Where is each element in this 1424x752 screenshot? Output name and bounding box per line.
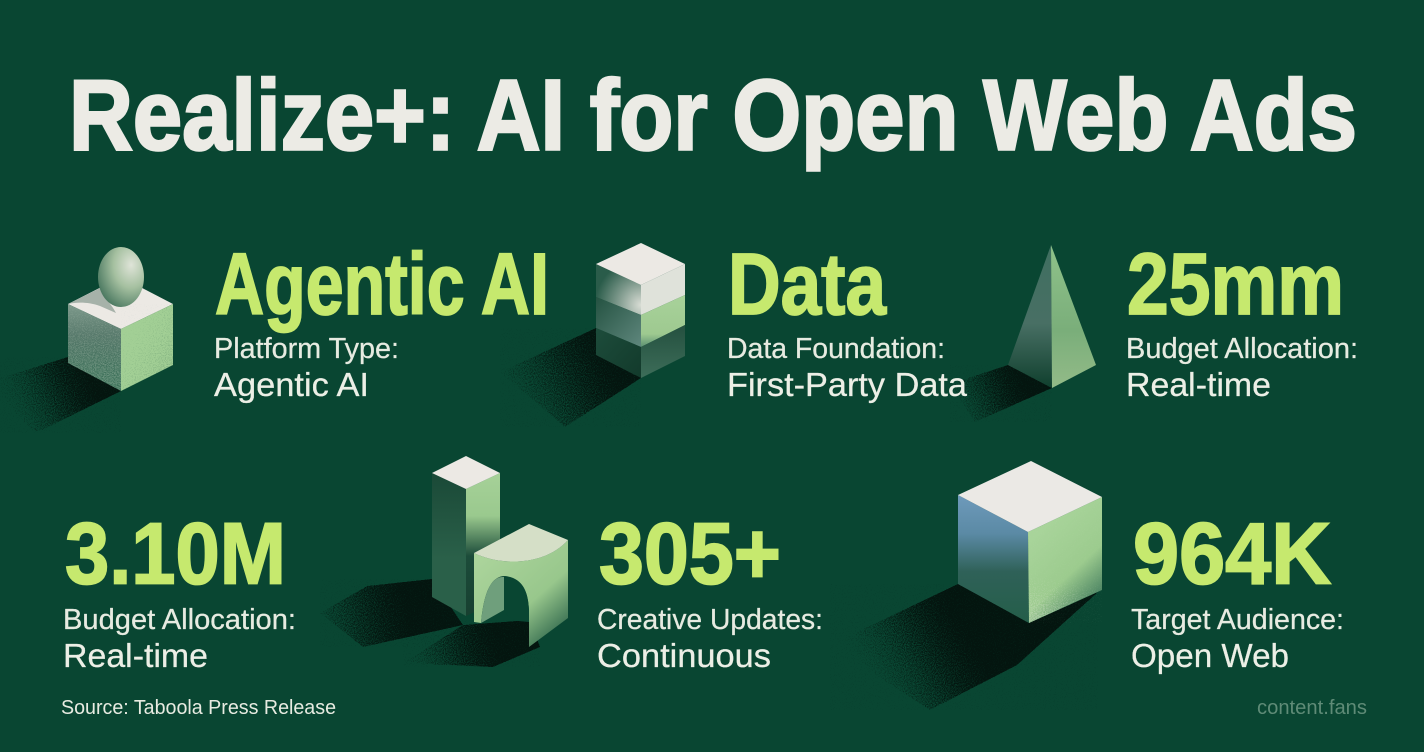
watermark: content.fans bbox=[1257, 697, 1367, 719]
big value: Data bbox=[728, 236, 887, 333]
shadow bbox=[950, 365, 1052, 422]
label: Budget Allocation: bbox=[1126, 333, 1358, 365]
egg bbox=[98, 247, 144, 307]
stat: 3.10M bbox=[63, 506, 296, 674]
big value: 964K bbox=[1133, 506, 1331, 602]
stat: 25mm bbox=[1126, 236, 1358, 403]
block faces bbox=[596, 243, 685, 378]
shadow bbox=[500, 328, 641, 427]
big value: 3.10M bbox=[65, 506, 286, 602]
label: Data Foundation: bbox=[727, 333, 945, 365]
cube faces bbox=[958, 461, 1102, 623]
pyramid faces bbox=[1008, 245, 1096, 388]
shadow bbox=[830, 584, 1098, 710]
stat: Data bbox=[727, 236, 968, 403]
source note: Source: Taboola Press Release bbox=[61, 697, 336, 719]
icon: pyramid bbox=[950, 245, 1096, 422]
label: Target Audience: bbox=[1131, 604, 1344, 636]
stat: 305+ bbox=[597, 506, 823, 674]
arch bbox=[474, 524, 568, 647]
label: Platform Type: bbox=[214, 333, 399, 365]
cube faces bbox=[68, 277, 173, 391]
big value: 305+ bbox=[599, 506, 781, 602]
label: Budget Allocation: bbox=[63, 604, 296, 636]
icon: tower and arch bbox=[320, 456, 568, 667]
shadow bbox=[0, 357, 121, 433]
big value: Agentic AI bbox=[215, 236, 549, 333]
icon: stacked block bbox=[500, 243, 685, 427]
icon: large cube bbox=[830, 461, 1102, 710]
detail: Agentic AI bbox=[214, 366, 369, 403]
stat: Agentic AI bbox=[214, 236, 549, 403]
detail: Open Web bbox=[1131, 637, 1289, 674]
detail: Real-time bbox=[1126, 366, 1271, 403]
icon: box with egg bbox=[0, 247, 173, 433]
detail: First-Party Data bbox=[727, 366, 968, 403]
big value: 25mm bbox=[1127, 236, 1344, 333]
label: Creative Updates: bbox=[597, 604, 823, 636]
tower bbox=[432, 456, 500, 616]
detail: Real-time bbox=[63, 637, 208, 674]
stat: 964K bbox=[1131, 506, 1344, 674]
shadows bbox=[320, 579, 540, 667]
detail: Continuous bbox=[597, 637, 771, 674]
